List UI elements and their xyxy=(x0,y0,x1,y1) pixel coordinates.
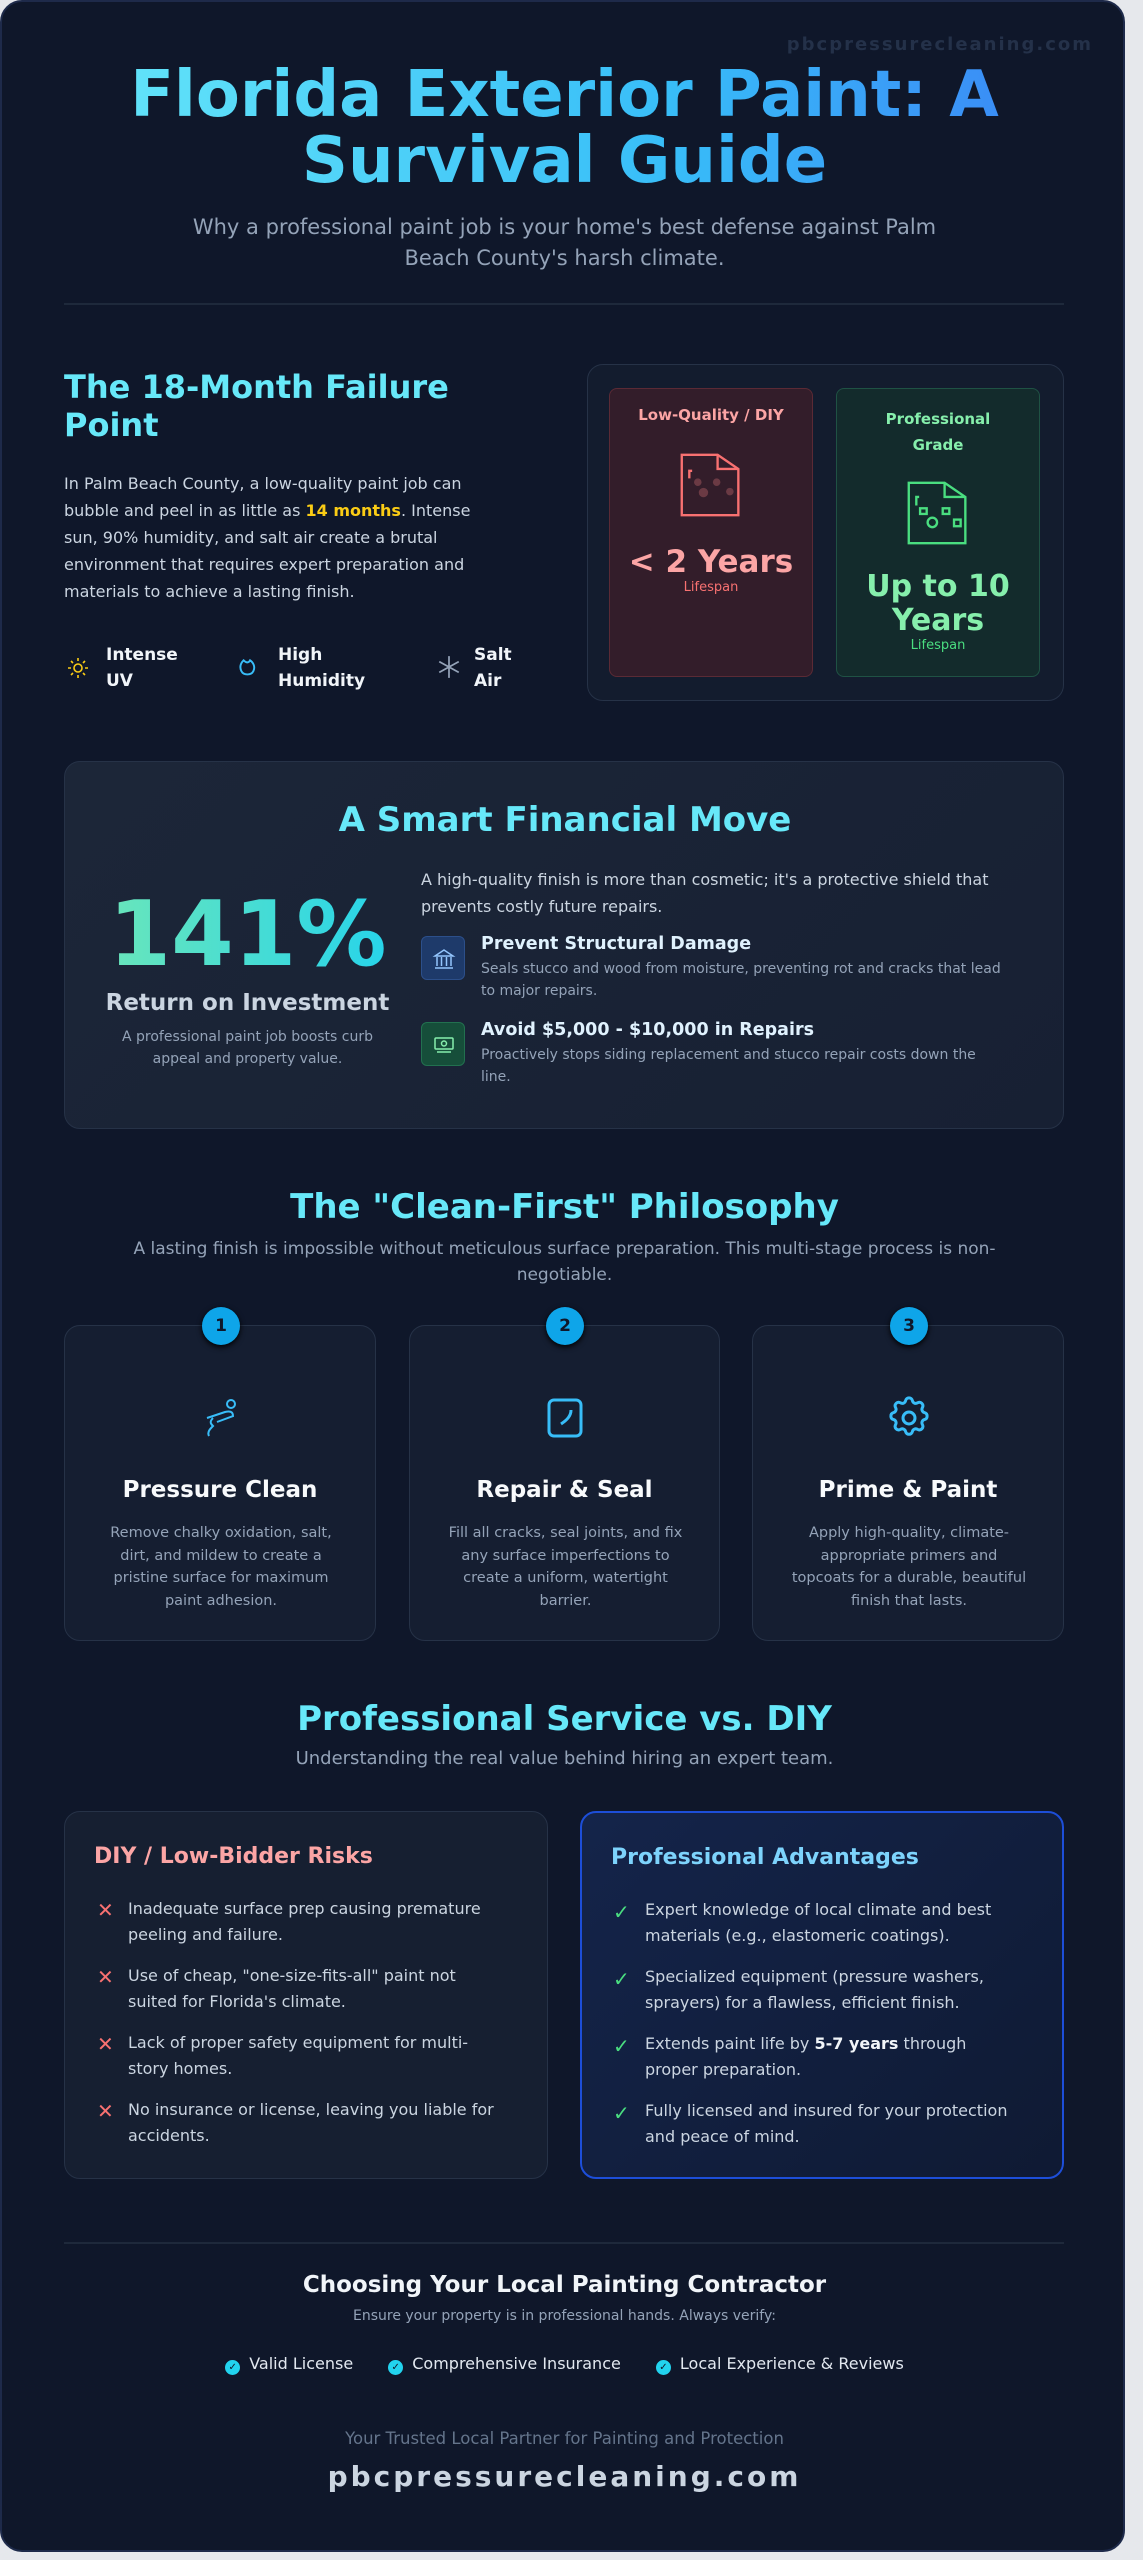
panel: DIY risks xyxy=(64,1811,548,2179)
benefit: repair costs: Avoid $5,000 - $10,000 in Repairs xyxy=(481,1020,814,1040)
benefit: repair costs: Proactively stops siding replacement and stucco repair costs down the line. xyxy=(481,1047,976,1085)
panel: pro advantages: ✓ xyxy=(613,1900,630,1924)
benefit: structural xyxy=(421,934,1001,999)
heading: A Smart Financial Move xyxy=(339,800,791,840)
panel: lifespan comparison xyxy=(587,364,1064,701)
panel: DIY risks: ✕ xyxy=(97,1965,114,1989)
factor: UV: Intense xyxy=(106,645,178,665)
panel: DIY risks: DIY / Low-Bidder Risks xyxy=(94,1844,373,1869)
contractor checklist: ✓ xyxy=(228,2362,237,2373)
title: Survival Guide xyxy=(302,124,827,198)
step 1 xyxy=(64,1325,376,1641)
benefits: A high-quality finish is more than cosmetic; it's a protective shield that prevents costly future repairs. xyxy=(421,870,988,916)
ROI stat xyxy=(106,882,389,1067)
subheading: Understanding the real value behind hiring an expert team. xyxy=(296,1748,833,1769)
card: professional: Up to 10 xyxy=(866,569,1010,604)
panel: DIY risks: ✕ xyxy=(97,2099,114,2123)
ROI stat: appeal and property value. xyxy=(153,1051,342,1067)
factor: humidity: Humidity xyxy=(278,671,365,691)
heading: pro vs diy: Professional Service vs. DIY xyxy=(297,1699,832,1739)
footer xyxy=(328,2429,801,2493)
factor: humidity: High xyxy=(278,645,322,665)
step 2: 2 xyxy=(559,1316,571,1336)
benefit: structural: Seals stucco and wood from moisture, preventing rot and cracks that lead to major repairs. xyxy=(481,961,1001,999)
panel: pro advantages: Specialized equipment (pressure washers, sprayers) for a flawless, efficient finish. xyxy=(645,1967,984,2012)
benefit: structural: Prevent Structural Damage xyxy=(481,934,751,954)
benefits xyxy=(421,870,1001,1085)
step 2: Repair & Seal xyxy=(476,1477,653,1503)
card: professional: Professional xyxy=(886,410,990,428)
heading: The 18-Month Failure Point xyxy=(64,368,449,444)
title: Florida Exterior Paint: A xyxy=(130,58,999,132)
benefit: repair costs xyxy=(421,1020,976,1085)
contractor checklist: Choosing Your Local Painting Contractor xyxy=(303,2272,826,2298)
card: professional xyxy=(836,388,1040,677)
panel: DIY risks: Use of cheap, "one-size-fits-all" paint not suited for Florida's climate. xyxy=(128,1966,456,2011)
panel: pro advantages: ✓ xyxy=(613,2101,630,2125)
climate factors xyxy=(68,645,512,691)
card: professional: Grade xyxy=(913,436,963,454)
factor: salt air xyxy=(438,645,512,691)
watermark: pbcpressurecleaning.com xyxy=(787,34,1093,55)
factor: salt air: Air xyxy=(474,671,501,691)
panel: smart financial move xyxy=(64,761,1064,1129)
step 3: Apply high-quality, climate-appropriate primers and topcoats for a durable, beautiful finish that lasts. xyxy=(792,1525,1026,1608)
title xyxy=(42,62,1087,194)
contractor checklist xyxy=(225,2272,904,2375)
step 2 xyxy=(409,1325,720,1641)
panel: pro advantages: Fully licensed and insured for your protection and peace of mind. xyxy=(645,2101,1007,2146)
panel: DIY risks: No insurance or license, leaving you liable for accidents. xyxy=(128,2100,494,2145)
panel: DIY risks: Inadequate surface prep causing premature peeling and failure. xyxy=(128,1899,481,1944)
section: 18-month failure point xyxy=(64,368,470,601)
step 3: 3 xyxy=(903,1316,915,1336)
card: low quality: < 2 Years xyxy=(629,544,793,580)
card: low quality xyxy=(609,388,813,677)
paragraph: In Palm Beach County, a low-quality paint job can bubble and peel in as little as 14 months. Intense sun, 90% humidity, and salt air create a brutal environment that requires expert preparation and materials to achieve a lasting finish. xyxy=(64,474,470,601)
heading: clean-first: The "Clean-First" Philosophy xyxy=(290,1187,839,1227)
step 3: Prime & Paint xyxy=(819,1477,997,1503)
step 1: Remove chalky oxidation, salt, dirt, and mildew to create a pristine surface for maximum paint adhesion. xyxy=(110,1525,332,1608)
panel: pro advantages: Professional Advantages xyxy=(611,1845,919,1870)
card: professional: Years xyxy=(892,603,984,638)
factor: UV: UV xyxy=(106,671,133,691)
card: low quality: Lifespan xyxy=(684,580,738,595)
factor: salt air: Salt xyxy=(474,645,512,665)
contractor checklist: Ensure your property is in professional hands. Always verify: xyxy=(353,2308,776,2324)
ROI stat: Return on Investment xyxy=(106,990,389,1016)
panel: pro advantages: ✓ xyxy=(613,2034,630,2058)
card: low quality: Low-Quality / DIY xyxy=(638,406,784,424)
factor: UV xyxy=(68,645,178,691)
factor: humidity xyxy=(239,645,365,691)
panel: pro advantages: ✓ xyxy=(613,1967,630,1991)
panel: pro advantages: Extends paint life by 5-7 years through proper preparation. xyxy=(645,2034,966,2079)
subheading: A lasting finish is impossible without meticulous surface preparation. This multi-stage process is non-negotiable. xyxy=(133,1239,996,1285)
panel: pro advantages xyxy=(580,1811,1064,2179)
footer: pbcpressurecleaning.com xyxy=(328,2460,801,2493)
step 1: Pressure Clean xyxy=(123,1477,317,1503)
panel: DIY risks: ✕ xyxy=(97,1898,114,1922)
ROI stat: 141% xyxy=(108,882,387,987)
step 1: 1 xyxy=(215,1316,227,1336)
card: professional: Lifespan xyxy=(911,638,965,653)
ROI stat: A professional paint job boosts curb xyxy=(122,1029,373,1045)
panel: pro advantages: Expert knowledge of local climate and best materials (e.g., elastomeric coatings). xyxy=(645,1900,991,1945)
step 2: Fill all cracks, seal joints, and fix any surface imperfections to create a uniform, watertight barrier. xyxy=(449,1525,682,1608)
step 3 xyxy=(752,1325,1064,1641)
panel: DIY risks: Lack of proper safety equipment for multi-story homes. xyxy=(128,2033,468,2078)
panel: DIY risks: ✕ xyxy=(97,2032,114,2056)
contractor checklist: Valid License Comprehensive Insurance Local Experience & Reviews xyxy=(249,2354,904,2373)
icon: damaged document xyxy=(680,454,740,516)
icon: intact document xyxy=(908,482,966,544)
subtitle: Why a professional paint job is your home's best defense against Palm Beach County's harsh climate. xyxy=(193,215,936,270)
contractor checklist: ✓ xyxy=(392,2362,400,2373)
contractor checklist: ✓ xyxy=(659,2362,668,2373)
footer: Your Trusted Local Partner for Painting and Protection xyxy=(345,2429,784,2448)
